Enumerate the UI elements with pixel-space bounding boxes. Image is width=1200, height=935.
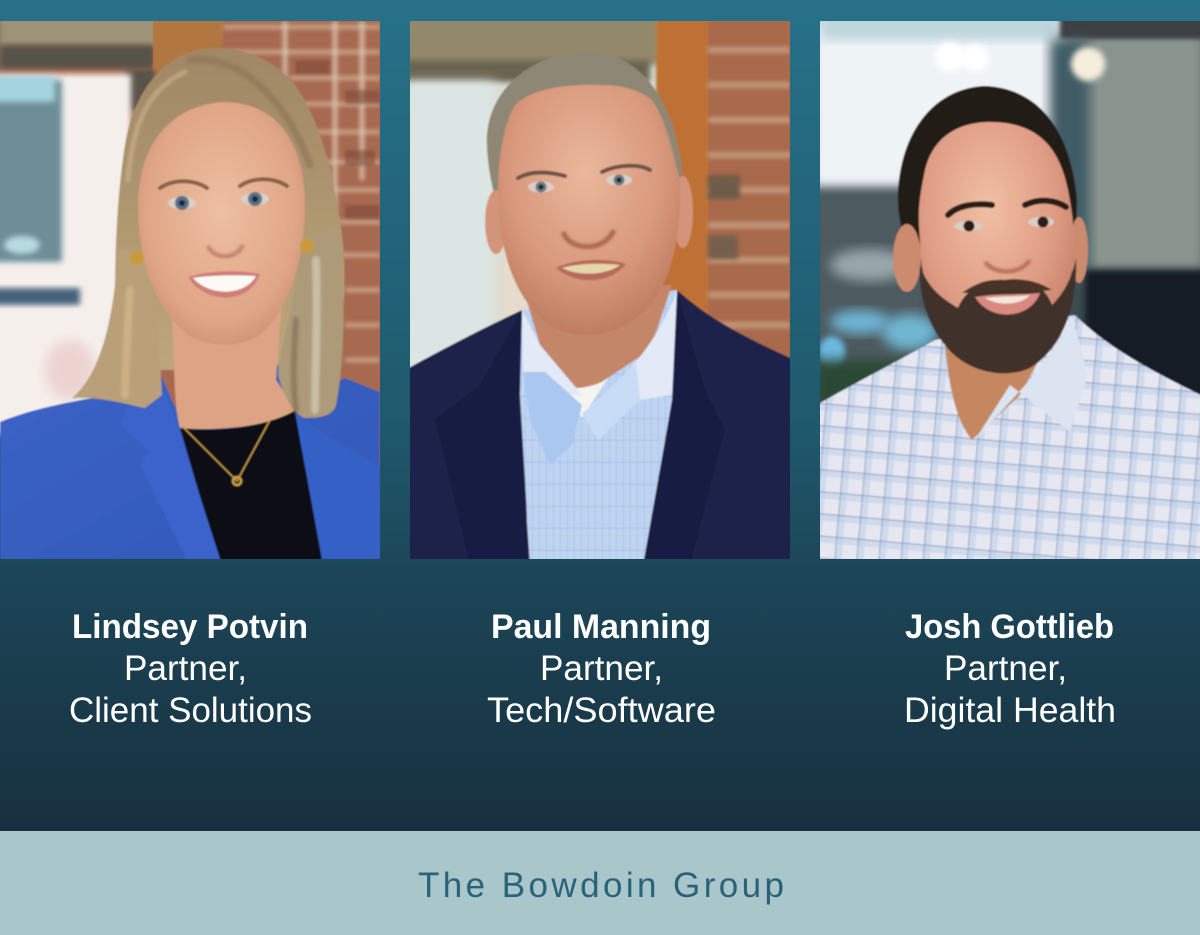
bokeh lights — [935, 42, 1105, 81]
necklace — [182, 420, 270, 481]
neck — [525, 285, 672, 395]
blazer lapels — [525, 397, 674, 559]
left eye — [528, 182, 554, 192]
beard — [920, 258, 1076, 373]
department: Client Solutions — [69, 691, 312, 730]
nose — [563, 230, 614, 247]
nose — [985, 260, 1030, 272]
smile — [975, 293, 1040, 315]
photo: Josh Gottlieb — [810, 15, 1200, 565]
shirt — [520, 290, 677, 565]
blurred office background — [0, 21, 380, 468]
smile — [556, 260, 626, 280]
face — [919, 122, 1074, 367]
footer band — [0, 831, 1200, 935]
hair back — [115, 48, 344, 370]
right lapel — [295, 412, 385, 565]
hair highlights — [125, 59, 317, 410]
grey hair — [486, 52, 683, 192]
caption: Josh Gottlieb — [904, 608, 1116, 730]
ears — [485, 176, 693, 254]
blue jacket — [0, 350, 380, 565]
white undershirt — [571, 378, 608, 418]
shirt collar right — [975, 315, 1088, 440]
photo: Lindsey Potvin — [0, 15, 385, 565]
caption: Lindsey Potvin — [69, 608, 312, 730]
right eye — [1028, 216, 1054, 228]
role: Partner, — [540, 649, 663, 688]
face — [498, 85, 680, 335]
plaid shirt — [815, 315, 1200, 565]
ears — [893, 217, 1088, 292]
blurred office background — [810, 15, 1200, 565]
black top — [180, 410, 323, 565]
role: Partner, — [944, 649, 1067, 688]
right eye — [606, 174, 632, 186]
necklace pendant — [233, 477, 241, 485]
department: Digital Health — [904, 691, 1116, 730]
moustache — [962, 280, 1052, 293]
right eye — [241, 192, 269, 206]
department: Tech/Software — [487, 691, 716, 730]
face — [138, 102, 305, 345]
blurred office background — [405, 15, 798, 565]
caption: Paul Manning — [487, 608, 716, 730]
front hair right lock — [277, 274, 344, 420]
eyebrows — [518, 166, 650, 178]
neck and chest — [170, 300, 298, 429]
name: Lindsey Potvin — [72, 608, 308, 646]
neck — [945, 340, 1050, 440]
name: Paul Manning — [491, 608, 711, 646]
left eye — [168, 196, 196, 210]
earrings — [130, 239, 314, 265]
footer company name: The Bowdoin Group — [418, 866, 784, 905]
front hair left lock — [72, 286, 163, 409]
nose — [208, 245, 243, 256]
shirt collar left — [900, 342, 975, 445]
shirt collar left — [522, 310, 582, 395]
shirt collar right — [630, 291, 678, 400]
name: Josh Gottlieb — [905, 608, 1114, 646]
inner collar left — [523, 372, 582, 465]
navy blazer — [405, 290, 795, 565]
left eye — [954, 220, 982, 232]
smile — [188, 271, 260, 298]
role: Partner, — [124, 649, 247, 688]
dark hair — [898, 86, 1077, 250]
photo: Paul Manning — [405, 15, 798, 565]
left lapel — [122, 391, 222, 559]
inner collar right — [582, 364, 640, 440]
eyebrows — [160, 179, 287, 188]
eyebrows — [948, 201, 1066, 215]
